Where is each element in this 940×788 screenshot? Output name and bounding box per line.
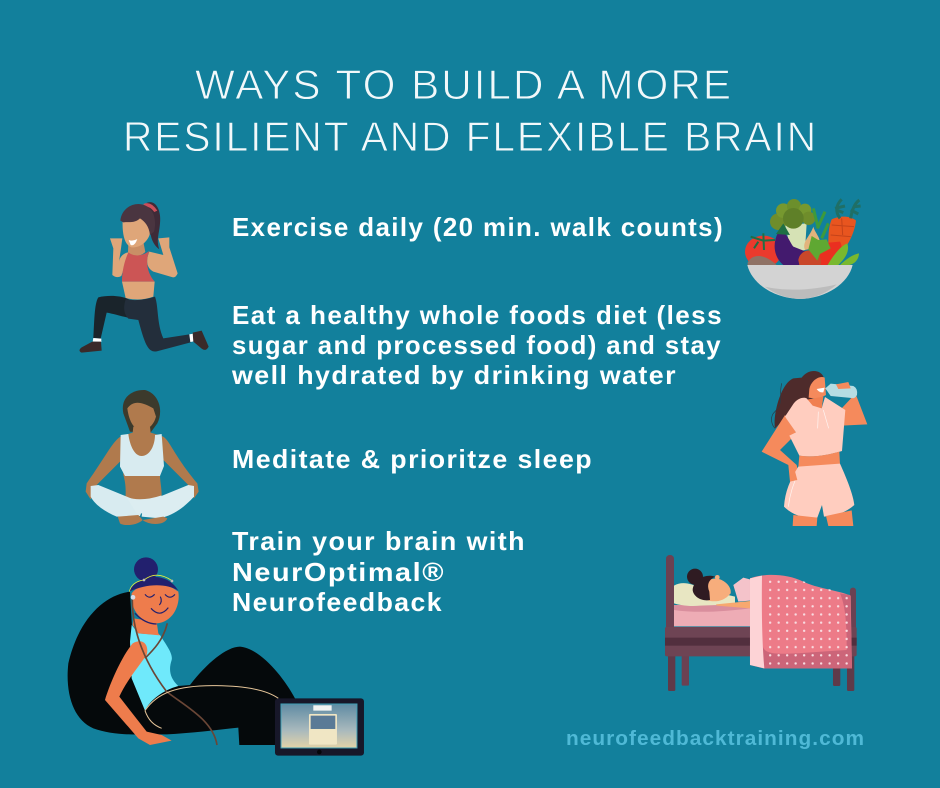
broccoli	[785, 223, 807, 253]
tablet	[275, 698, 364, 756]
text: diet and hydration	[231, 300, 723, 390]
mattress	[674, 604, 757, 626]
beet and leaves	[798, 250, 821, 265]
icon: woman meditating	[86, 390, 199, 525]
hair	[775, 371, 824, 428]
text: neurofeedback: Neurofeedback	[232, 587, 443, 617]
red veg	[813, 242, 841, 265]
shorts	[784, 464, 854, 518]
icon: bowl of vegetables	[745, 199, 861, 299]
legs	[793, 510, 853, 526]
peas	[828, 243, 859, 265]
face	[809, 377, 826, 399]
title: WAYS TO BUILD A MORE	[195, 61, 733, 108]
icon: woman sleeping in bed	[665, 555, 857, 691]
hair	[687, 569, 703, 585]
pillow	[674, 583, 735, 606]
blanket	[750, 575, 852, 668]
text: neurofeedback: NeurOptimal®	[232, 557, 445, 587]
neck	[805, 397, 823, 409]
headset wires	[129, 575, 172, 592]
arm	[105, 641, 172, 745]
raised arm	[842, 387, 867, 426]
eggplant	[775, 232, 806, 265]
water bottle	[825, 384, 857, 398]
bed posts	[666, 555, 674, 632]
nightdress and arm	[733, 578, 758, 602]
carrots	[828, 217, 856, 252]
bed frame	[665, 627, 857, 656]
icon: woman with neurofeedback tablet	[68, 557, 364, 756]
midriff	[798, 452, 840, 467]
potato	[748, 256, 777, 265]
text: neurofeedback	[232, 526, 526, 617]
hair bun	[134, 557, 158, 581]
text: exercise: Exercise daily (20 min. walk counts)	[232, 212, 724, 242]
face	[145, 594, 175, 613]
title	[123, 61, 818, 160]
crop top	[785, 397, 845, 456]
face	[705, 578, 731, 601]
text: diet and hydration: well hydrated by drinking water	[231, 360, 677, 390]
beanbag and legs	[68, 592, 295, 745]
text: meditate and sleep: Meditate & prioritze sleep	[232, 444, 593, 474]
text: diet and hydration: Eat a healthy whole foods diet (less	[232, 300, 723, 330]
head	[132, 584, 179, 623]
bowl	[747, 265, 853, 299]
title: RESILIENT AND FLEXIBLE BRAIN	[123, 113, 818, 160]
icon: woman exercising	[79, 202, 209, 353]
icon: woman drinking water	[762, 371, 867, 526]
neck	[133, 618, 160, 635]
text: neurofeedback: Train your brain with	[232, 526, 526, 556]
website url: neurofeedbacktraining.com	[566, 728, 865, 750]
text: diet and hydration: sugar and processed food) and stay	[232, 330, 722, 360]
tomato	[745, 236, 782, 268]
hip arm	[762, 415, 800, 482]
top	[130, 625, 178, 711]
onion and leek	[804, 227, 820, 250]
